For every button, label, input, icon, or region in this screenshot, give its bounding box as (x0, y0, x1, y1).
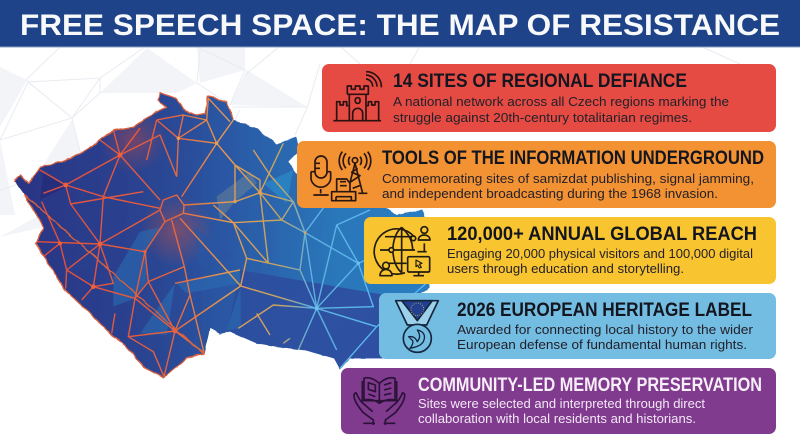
panel: tools of the information underground: and independent broadcasting during the 1968 invasion. (382, 186, 718, 201)
network lines (37, 98, 430, 377)
panel: 14 sites of regional defiance (322, 64, 776, 132)
map border (15, 93, 233, 377)
icon: globe, users and computer (374, 227, 430, 276)
icon: microphone, radio tower, printer (311, 152, 371, 201)
panel: annual global reach (364, 217, 776, 284)
heading: 120,000+ ANNUAL GLOBAL REACH (447, 224, 757, 245)
panel: 14 sites of regional defiance: struggle against 20th-century totalitarian regimes. (393, 110, 692, 125)
panel: european heritage label (379, 293, 776, 359)
map: Czech Republic network (15, 93, 433, 377)
header banner (0, 0, 800, 48)
description: A national network across all Czech regions marking the (393, 94, 729, 109)
icon: castle with signal (333, 72, 381, 121)
panel: european heritage label: European defense of fundamental human rights. (457, 337, 747, 352)
title: FREE SPEECH SPACE: THE MAP OF RESISTANCE (20, 9, 780, 42)
description: Sites were selected and interpreted through direct (418, 396, 705, 411)
icon: medal with EU ribbon and dove (396, 301, 438, 352)
panel: annual global reach: users through education and storytelling. (447, 261, 684, 276)
description: Commemorating sites of samizdat publishing, signal jamming, (382, 171, 754, 186)
heading: 14 SITES OF REGIONAL DEFIANCE (393, 71, 687, 92)
description: Engaging 20,000 physical visitors and 100,000 digital (447, 246, 753, 261)
panel: tools of the information underground (297, 141, 776, 208)
map silhouette (15, 93, 430, 377)
description: Awarded for connecting local history to the wider (457, 322, 754, 337)
icon: hands holding open book (354, 378, 405, 425)
heading: 2026 EUROPEAN HERITAGE LABEL (457, 300, 752, 321)
panel: community-led memory preservation (341, 368, 776, 434)
panel: community-led memory preservation: collaboration with local residents and historians. (418, 411, 696, 426)
